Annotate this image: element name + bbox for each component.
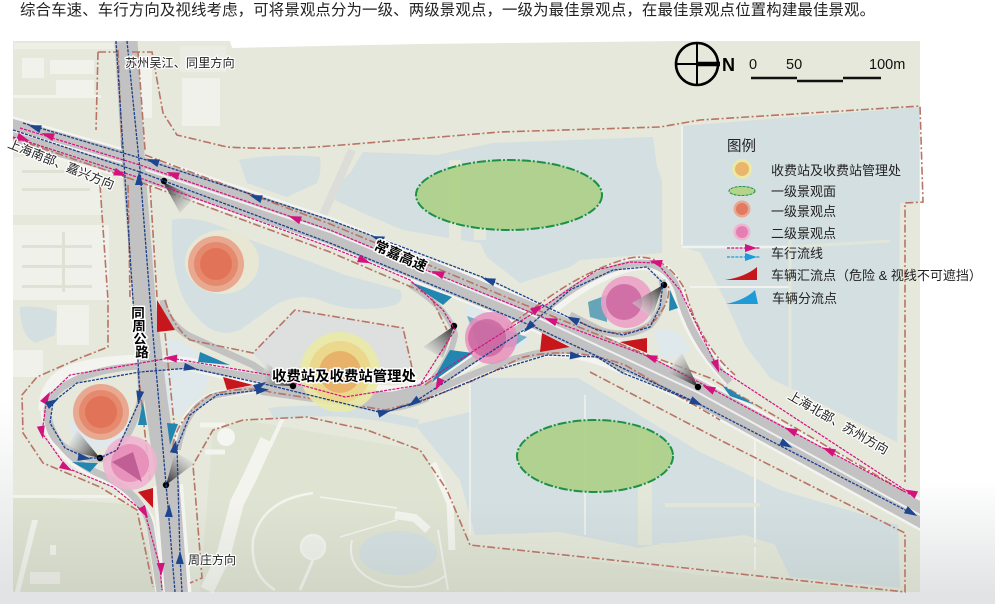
first-level landscape surfaces xyxy=(416,160,673,492)
legend item: second-level point xyxy=(734,224,836,241)
Changjia expressway xyxy=(5,129,930,520)
sight-line cones xyxy=(65,178,701,488)
legend item: first-level point xyxy=(734,200,836,219)
road label: Tongzhou road: 路 xyxy=(135,345,149,360)
road label: Tongzhou road: 同 xyxy=(131,306,145,321)
legend item: traffic flow xyxy=(727,244,823,261)
water bodies xyxy=(20,107,919,588)
south park paths xyxy=(200,418,452,590)
scale bar: 100m xyxy=(869,57,905,73)
legend xyxy=(725,138,982,306)
legend item: first-level surface xyxy=(729,184,836,199)
second-level point: east xyxy=(588,276,653,328)
direction label: Shanghai north: 上海北部、苏州方向 xyxy=(786,388,891,457)
Tongzhou road xyxy=(126,41,177,600)
legend item: first-level point: 一级景观点 xyxy=(771,204,836,219)
direction label: Shanghai south: 上海南部、嘉兴方向 xyxy=(6,136,117,192)
compass xyxy=(676,43,735,85)
first-level point: south-west xyxy=(73,384,129,440)
direction label: Suzhou Wujiang: 苏州吴江、同里方向 xyxy=(125,55,235,70)
second-level point: centre xyxy=(465,312,527,364)
road label: Tongzhou road: 周 xyxy=(132,319,146,334)
misty page background xyxy=(0,400,995,604)
landscape point circles xyxy=(73,236,653,490)
legend item: first-level surface: 一级景观面 xyxy=(771,184,836,199)
legend heading: 图例 xyxy=(727,138,756,155)
distant haze over the map xyxy=(13,500,920,592)
legend item: toll station: 收费站及收费站管理处 xyxy=(771,163,901,178)
scale bar: 50 xyxy=(786,57,802,73)
magenta flows xyxy=(13,128,915,590)
road shoulders xyxy=(5,129,930,600)
legend item: merge point: 车辆汇流点（危险 & 视线不可遮挡） xyxy=(771,268,982,283)
blue diverge wedges xyxy=(72,282,755,472)
legend item: diverge point: 车辆分流点 xyxy=(772,291,837,306)
legend item: traffic flow: 车行流线 xyxy=(771,246,823,261)
west neighbourhood texture xyxy=(13,43,226,592)
legend item: diverge point xyxy=(726,290,837,306)
legend item: toll station xyxy=(732,159,901,179)
legend item: second-level point: 二级景观点 xyxy=(771,226,836,241)
scale bar: 0 xyxy=(749,57,757,73)
road label: Tongzhou road: 公 xyxy=(133,332,147,347)
scale bar xyxy=(749,57,905,81)
first-level point: north-west xyxy=(188,236,244,292)
toll station plaza xyxy=(253,310,415,378)
toll station point xyxy=(300,332,380,412)
ramps xyxy=(47,263,730,592)
second-level point: south-west xyxy=(103,436,157,490)
direction label: Zhouzhuang: 周庄方向 xyxy=(188,552,236,567)
water dividers and paths xyxy=(320,126,890,570)
road label: Changjia expressway: 常嘉高速 xyxy=(372,237,429,275)
road label: Tongzhou road xyxy=(131,306,149,360)
flow arrowheads xyxy=(16,129,918,576)
title text: 综合车速、车行方向及视线考虑，可将景观点分为一级、两级景观点，一级为最佳景观点，在最佳景观点位置构建最佳景观。 xyxy=(20,1,875,19)
compass: N xyxy=(722,55,735,75)
red merge wedges xyxy=(138,300,647,508)
toll station label: 收费站及收费站管理处 xyxy=(272,367,417,385)
